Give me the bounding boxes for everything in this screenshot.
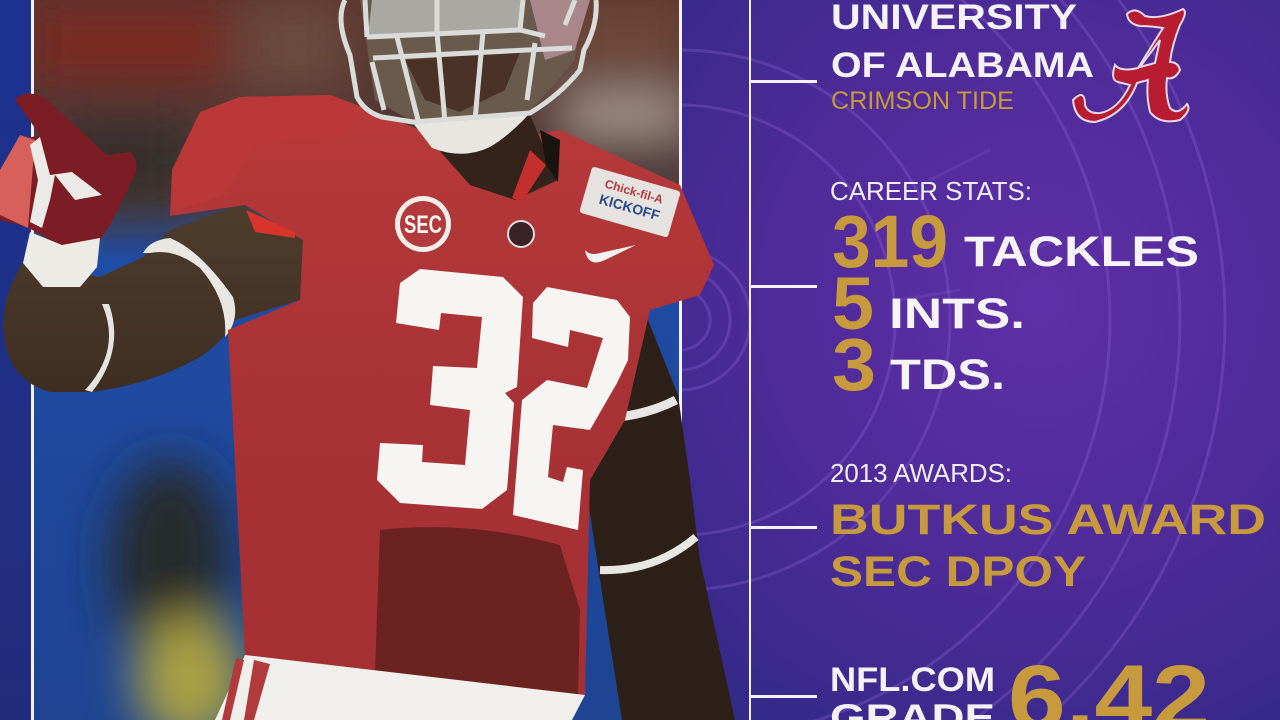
stat: tackles: 319 (832, 200, 948, 283)
glove (0, 93, 137, 247)
stats heading: CAREER STATS: (830, 176, 1032, 206)
tick: stats (751, 285, 817, 288)
team name: CRIMSON TIDE (831, 87, 1014, 115)
awards heading: 2013 AWARDS: (830, 458, 1012, 488)
SEC patch: SEC (404, 211, 442, 239)
pointing arm (3, 205, 303, 392)
number 32 (377, 269, 630, 530)
award lines (830, 496, 1266, 596)
stat: ints: INTS. (889, 290, 1025, 338)
stat: tds (832, 323, 1005, 406)
neck (430, 115, 558, 200)
award lines: BUTKUS AWARD (830, 496, 1266, 544)
right arm (585, 300, 735, 720)
stat: tds: 3 (832, 323, 876, 406)
left blue strip (0, 0, 31, 720)
tick: awards (751, 526, 817, 529)
helmet (341, 0, 596, 154)
chin strap (413, 113, 530, 154)
kickoff patch: KICKOFF (597, 191, 662, 223)
player photo (0, 0, 735, 720)
SEC patch (395, 196, 451, 252)
stat: tds: TDS. (890, 351, 1005, 399)
wrist wrap (23, 232, 100, 287)
tick: grade (751, 695, 817, 698)
stat: ints (832, 262, 1025, 345)
stat: tackles (832, 200, 1199, 283)
face (360, 0, 580, 122)
photo background (30, 0, 690, 720)
grade label (830, 661, 995, 720)
A badge (508, 221, 534, 247)
awards (830, 458, 1266, 596)
stat: ints: 5 (832, 262, 874, 345)
tick: university (751, 80, 817, 83)
jersey (170, 95, 714, 695)
kickoff patch: Chick-fil-A (603, 177, 665, 207)
school name (831, 0, 1094, 85)
face mask (341, 0, 596, 122)
stat: tackles: TACKLES (964, 228, 1199, 276)
white frame lines (31, 0, 751, 720)
award lines: SEC DPOY (830, 548, 1086, 596)
career stats (830, 176, 1199, 406)
school name: OF ALABAMA (831, 46, 1094, 85)
NFL grade (830, 647, 1210, 720)
kickoff patch (579, 166, 681, 238)
swoosh (585, 245, 636, 262)
pants (215, 655, 585, 720)
icon: Alabama script A (1073, 9, 1188, 122)
grade label: NFL.COM (830, 661, 995, 699)
